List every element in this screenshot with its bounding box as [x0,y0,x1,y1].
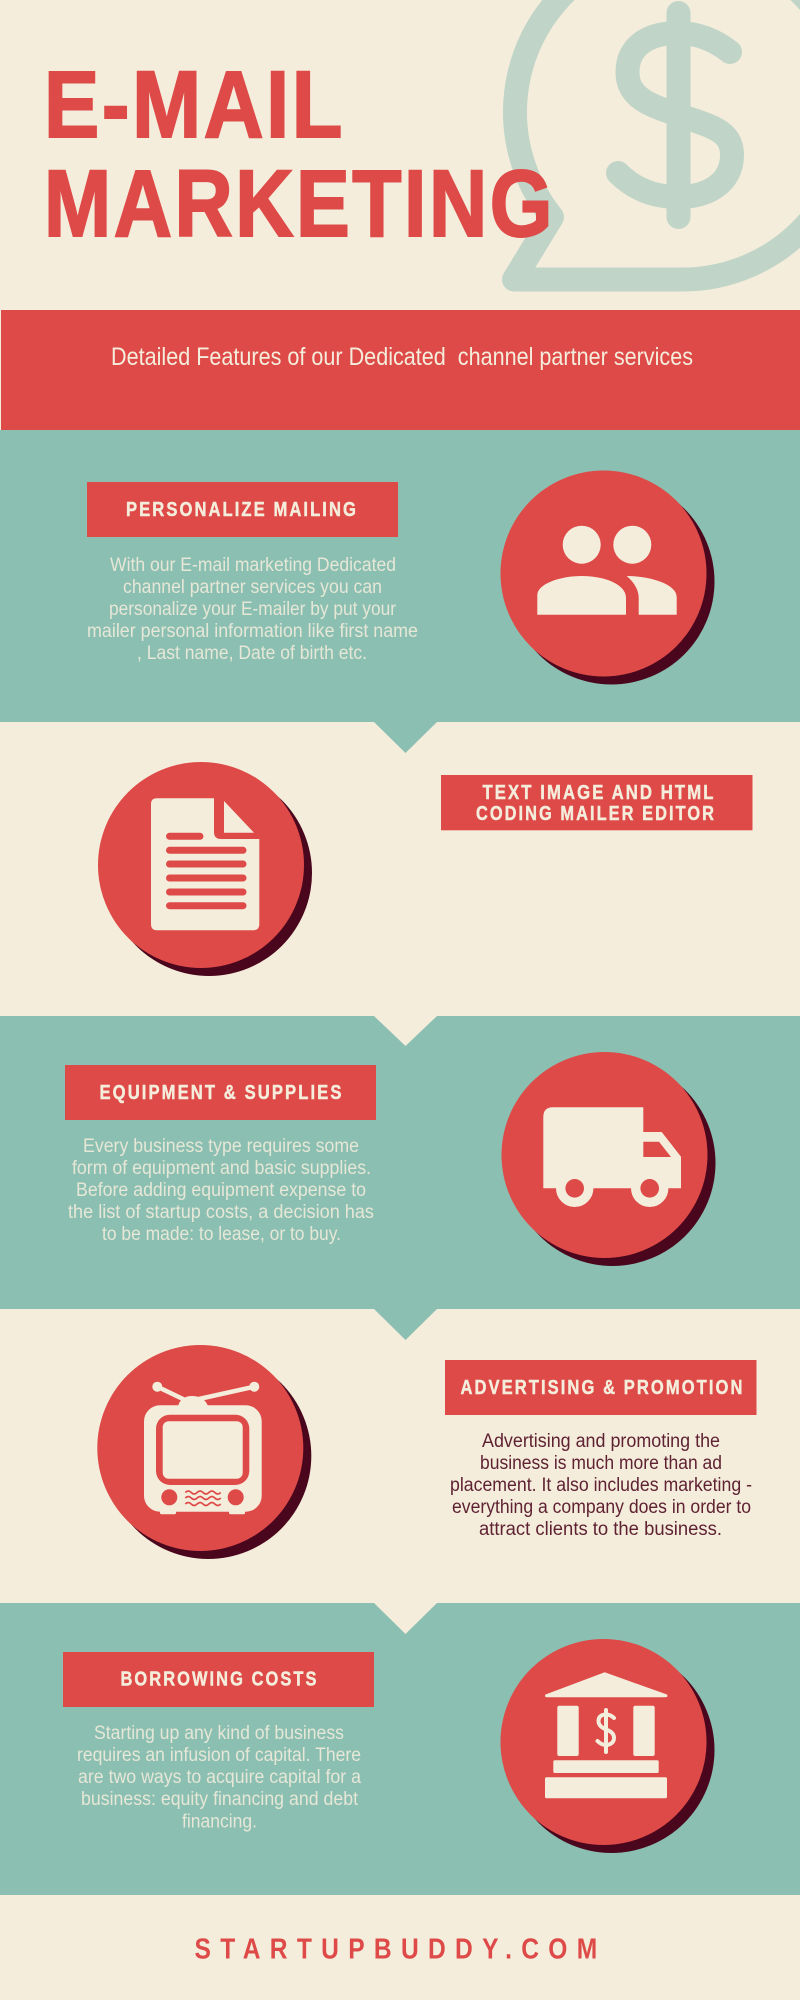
text block: advertising and promotion: placement. It also includes marketing - [450,1475,752,1496]
text block: personalize mailing: channel partner services you can [123,577,382,598]
text block: borrowing costs: are two ways to acquire capital for a [78,1767,361,1788]
panel: personalize mailing [0,430,800,722]
icon: document [98,762,312,976]
text block: personalize mailing: , Last name, Date of birth etc. [137,643,367,664]
icon: delivery truck [502,1052,716,1266]
text block: equipment and supplies [68,1136,374,1245]
panel: advertising and promotion [0,1309,800,1603]
icon: speech bubble with dollar sign [514,0,800,280]
title [44,52,555,257]
heading: advertising and promotion [445,1360,756,1415]
panel: borrowing costs [0,1603,800,1895]
title: MARKETING [44,151,555,257]
heading: equipment and supplies [65,1065,376,1120]
panel: equipment and supplies [0,1016,800,1309]
footer website text: STARTUPBUDDY.COM [194,1934,606,1966]
text block: borrowing costs: Starting up any kind of business [94,1723,344,1744]
icon: television [97,1345,311,1559]
text block: advertising and promotion: Advertising and promoting the [482,1431,720,1452]
text block: equipment and supplies: Before adding equipment expense to [76,1180,366,1201]
heading: borrowing costs [63,1652,374,1707]
text block: advertising and promotion [450,1431,752,1540]
heading: mailer editor: TEXT IMAGE AND HTML [482,782,716,804]
panel: header [0,0,800,310]
text block: personalize mailing: personalize your E-mailer by put your [109,599,397,620]
arrow: notch [374,1603,437,1634]
text block: borrowing costs [77,1723,361,1832]
text block: advertising and promotion: business is much more than ad [480,1453,722,1474]
text block: borrowing costs: requires an infusion of capital. There [77,1745,361,1766]
heading: advertising and promotion: ADVERTISING & PROMOTION [460,1377,744,1399]
heading: personalize mailing: PERSONALIZE MAILING [126,499,358,521]
text block: equipment and supplies: the list of startup costs, a decision has [68,1202,374,1223]
text block: personalize mailing: mailer personal information like first name [87,621,418,642]
subtitle: Detailed Features of our Dedicated channel partner services [111,343,693,371]
text block: advertising and promotion: attract clients to the business. [479,1519,722,1540]
heading: borrowing costs: BORROWING COSTS [120,1669,318,1691]
title: E-MAIL [44,52,345,158]
panel: subtitle band [1,310,800,430]
arrow: notch [374,722,437,753]
heading: mailer editor [441,775,752,830]
heading: mailer editor: CODING MAILER EDITOR [476,803,716,825]
arrow: notch [374,1016,437,1046]
heading: personalize mailing [87,482,398,537]
text block: borrowing costs: financing. [182,1812,257,1832]
panel: text image and html coding mailer editor [0,722,800,1016]
text block: equipment and supplies: to be made: to lease, or to buy. [102,1224,341,1245]
text block: borrowing costs: business: equity financing and debt [81,1789,359,1810]
heading: equipment and supplies: EQUIPMENT & SUPPLIES [100,1082,344,1104]
text block: advertising and promotion: everything a company does in order to [452,1497,751,1518]
icon: bank [500,1639,714,1853]
text block: personalize mailing [87,555,418,664]
arrow: notch [374,1309,437,1340]
text block: equipment and supplies: Every business type requires some [83,1136,359,1157]
icon: people [500,470,714,684]
text block: personalize mailing: With our E-mail marketing Dedicated [110,555,396,576]
panel: footer [0,1895,800,2000]
text block: equipment and supplies: form of equipment and basic supplies. [72,1158,371,1179]
